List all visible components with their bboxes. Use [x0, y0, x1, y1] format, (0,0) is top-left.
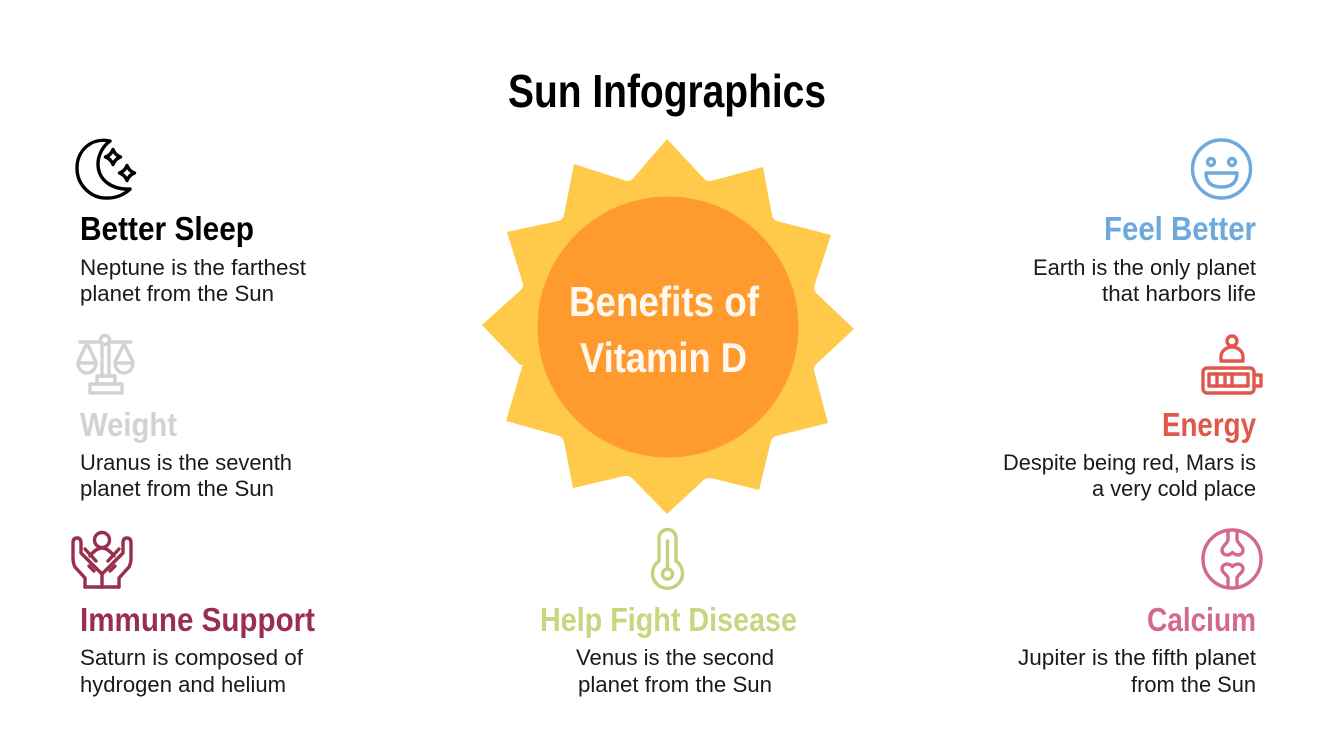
- panel: calcium: [1018, 530, 1261, 697]
- sun label: Vitamin D: [580, 334, 747, 381]
- description: Neptune is the farthest: [80, 255, 306, 280]
- description: Venus is the second: [576, 645, 774, 670]
- description: that harbors life: [1102, 281, 1256, 306]
- panel: better sleep: [77, 140, 306, 306]
- icon: moon and stars: [77, 140, 134, 198]
- description: Despite being red, Mars is: [1003, 450, 1256, 475]
- sun rays: [482, 139, 854, 514]
- icon: person and battery: [1203, 336, 1261, 393]
- sun disc: [538, 196, 798, 458]
- heading: Energy: [1162, 407, 1256, 444]
- panel: feel better: [1033, 140, 1256, 306]
- heading: Help Fight Disease: [540, 602, 797, 639]
- description: Jupiter is the fifth planet: [1018, 645, 1256, 670]
- description: planet from the Sun: [80, 281, 274, 306]
- sun label: [569, 278, 760, 381]
- description: [576, 645, 774, 697]
- heading: Feel Better: [1104, 211, 1256, 248]
- description: planet from the Sun: [80, 476, 274, 501]
- panel: energy: [1003, 336, 1261, 501]
- panel: immune support: [73, 532, 315, 697]
- icon: hands holding person: [73, 532, 131, 587]
- description: hydrogen and helium: [80, 672, 286, 697]
- description: Earth is the only planet: [1033, 255, 1256, 280]
- description: [80, 450, 292, 501]
- heading: Weight: [80, 407, 177, 444]
- description: Uranus is the seventh: [80, 450, 292, 475]
- description: [1003, 450, 1256, 501]
- description: [80, 645, 304, 697]
- title: Sun Infographics: [508, 65, 826, 117]
- panel: help fight disease: [540, 530, 797, 697]
- panel: weight: [78, 336, 292, 501]
- icon: joint bones: [1203, 530, 1261, 588]
- description: a very cold place: [1092, 476, 1256, 501]
- icon: scales: [78, 336, 133, 393]
- heading: Calcium: [1147, 602, 1256, 639]
- description: [80, 255, 306, 306]
- description: [1033, 255, 1256, 306]
- description: planet from the Sun: [578, 672, 772, 697]
- description: [1018, 645, 1256, 697]
- sun label: Benefits of: [569, 278, 760, 325]
- icon: smiley: [1192, 140, 1250, 198]
- description: Saturn is composed of: [80, 645, 304, 670]
- heading: Immune Support: [80, 602, 315, 639]
- icon: thermometer: [652, 530, 682, 588]
- description: from the Sun: [1131, 672, 1256, 697]
- heading: Better Sleep: [80, 211, 254, 248]
- central sun graphic: [482, 139, 854, 514]
